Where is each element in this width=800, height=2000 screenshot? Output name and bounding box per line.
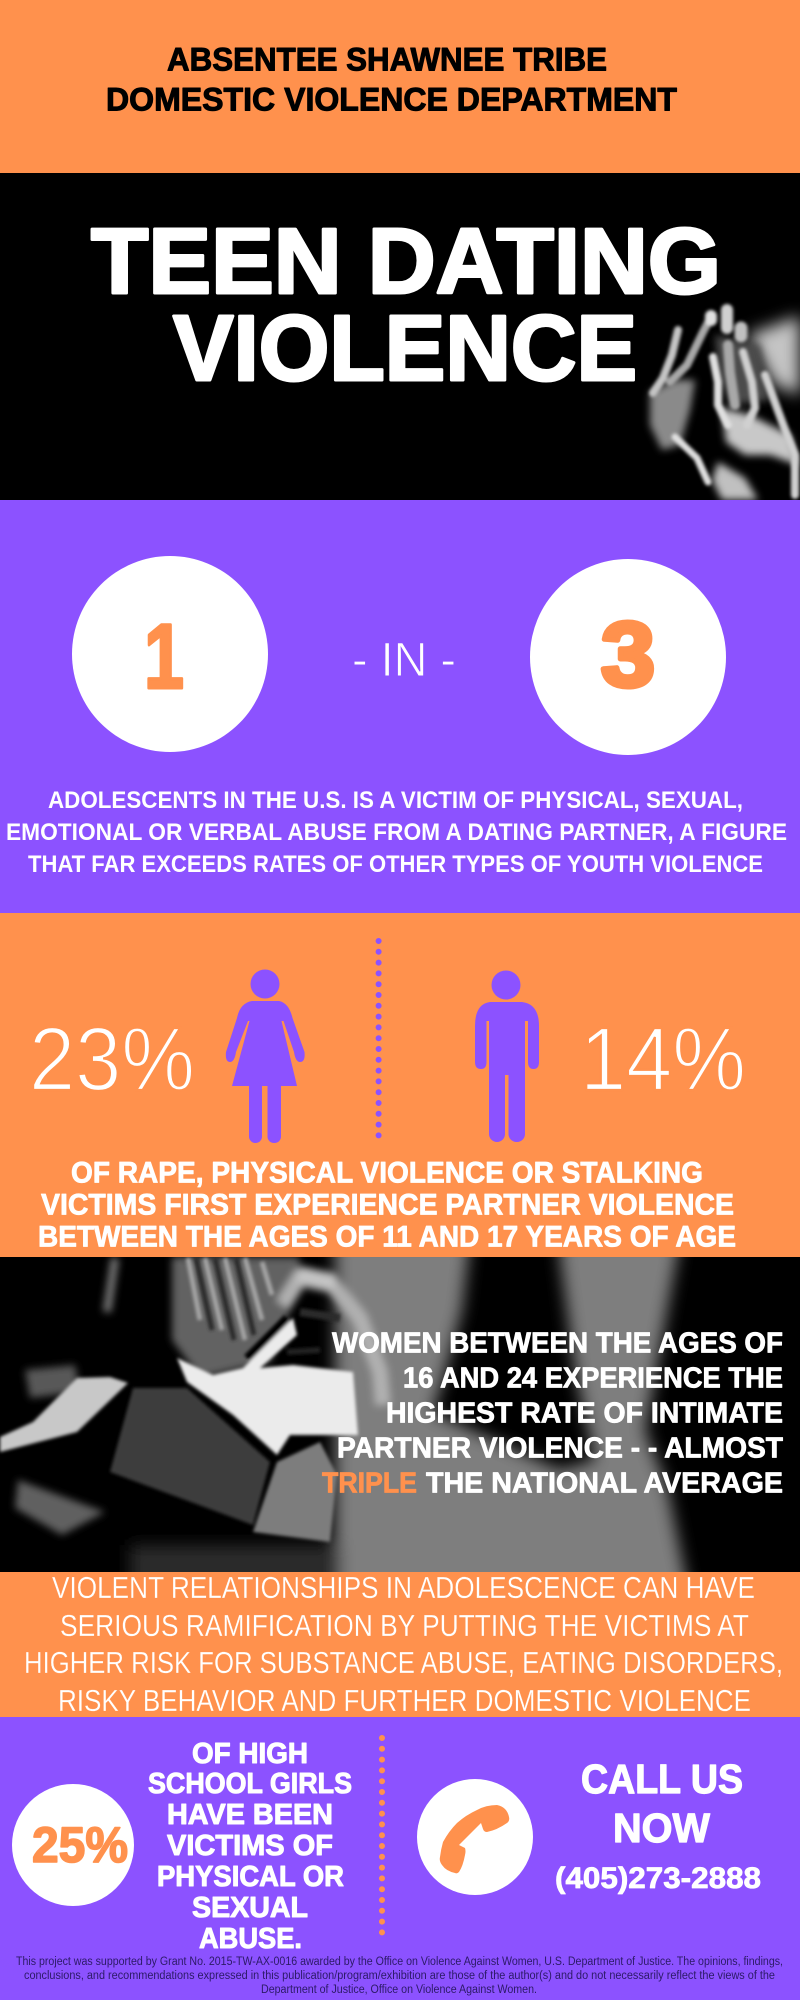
text: in: - IN -	[352, 634, 456, 687]
image: raised hands	[650, 310, 800, 500]
text: call us now	[581, 1756, 743, 1851]
stat: 14 percent: 14%	[580, 1010, 746, 1110]
circle: 25 percent	[12, 1784, 134, 1906]
panel: ramifications	[0, 1571, 800, 1718]
text: high school girls statement: SEXUAL	[192, 1892, 308, 1924]
text: first experience statement	[38, 1157, 736, 1254]
text: first experience statement: OF RAPE, PHYSICAL VIOLENCE OR STALKING	[71, 1157, 703, 1190]
text: triple the national average: PARTNER VIOLENCE - - ALMOST	[337, 1433, 784, 1465]
text: grant disclaimer: conclusions, and recommendations expressed in this publication/program/exhibition are those of the author(s) and do not necessarily reflect the views of the	[24, 1970, 775, 1982]
text: call us now: CALL US	[581, 1756, 743, 1802]
heading: organisation name: ABSENTEE SHAWNEE TRIBE	[167, 42, 607, 78]
text: phone number: (405)273-2888	[555, 1862, 761, 1895]
panel: title with hand photo	[0, 173, 800, 500]
text: triple the national average: TRIPLE	[322, 1468, 417, 1500]
heading: organisation name: DOMESTIC VIOLENCE DEPARTMENT	[106, 82, 677, 118]
circle: number 1	[72, 556, 268, 752]
stat: 23 percent: 23%	[29, 1010, 195, 1110]
text: high school girls statement: VICTIMS OF	[167, 1830, 333, 1862]
icon: woman	[226, 970, 305, 1143]
circle: number 3	[530, 559, 726, 755]
text: triple the national average	[322, 1328, 784, 1500]
text: high school girls statement	[148, 1738, 352, 1955]
text: triple the national average: HIGHEST RATE OF INTIMATE	[386, 1398, 783, 1430]
panel: 1 in 3 statistic	[0, 500, 800, 913]
icon: phone in circle	[417, 1779, 533, 1895]
text: adolescents statement	[6, 787, 787, 878]
panel: gender statistics	[0, 913, 800, 1257]
divider: orange dotted line	[379, 1738, 385, 1933]
panel: photo with triple statistic	[0, 1257, 800, 1572]
text: call us now: NOW	[613, 1805, 710, 1851]
circle: 25 percent: 25%	[32, 1817, 128, 1873]
text: triple the national average: 16 AND 24 EXPERIENCE THE	[403, 1363, 783, 1395]
text: grant disclaimer: Department of Justice, Office on Violence Against Women.	[261, 1984, 537, 1996]
text: high school girls statement: HAVE BEEN	[167, 1799, 333, 1831]
text: adolescents statement: ADOLESCENTS IN THE U.S. IS A VICTIM OF PHYSICAL, SEXUAL,	[48, 787, 743, 814]
text: ramifications paragraph	[24, 1571, 783, 1718]
text: triple the national average: THE NATIONAL AVERAGE	[426, 1468, 783, 1500]
title: TEEN DATING	[91, 209, 721, 313]
panel: high school girls and call to action	[0, 1717, 800, 2000]
circle: number 3: 3	[601, 604, 655, 706]
text: high school girls statement: ABUSE.	[199, 1923, 302, 1955]
text: high school girls statement: OF HIGH	[192, 1738, 308, 1770]
text: first experience statement: BETWEEN THE AGES OF 11 AND 17 YEARS OF AGE	[38, 1221, 736, 1254]
text: grant disclaimer	[16, 1956, 783, 1996]
text: first experience statement: VICTIMS FIRST EXPERIENCE PARTNER VIOLENCE	[41, 1189, 734, 1222]
heading: organisation name	[106, 42, 677, 118]
panel: header band	[0, 0, 800, 173]
title: VIOLENCE	[173, 296, 637, 400]
circle: number 1: 1	[144, 606, 184, 708]
image: blurred photo of a couple	[0, 1257, 696, 1572]
icon: man	[475, 970, 539, 1142]
title	[91, 209, 721, 400]
text: high school girls statement: SCHOOL GIRLS	[148, 1768, 352, 1800]
text: high school girls statement: PHYSICAL OR	[157, 1861, 344, 1893]
divider: dotted line	[376, 941, 382, 1136]
text: triple the national average: WOMEN BETWEEN THE AGES OF	[332, 1328, 783, 1360]
